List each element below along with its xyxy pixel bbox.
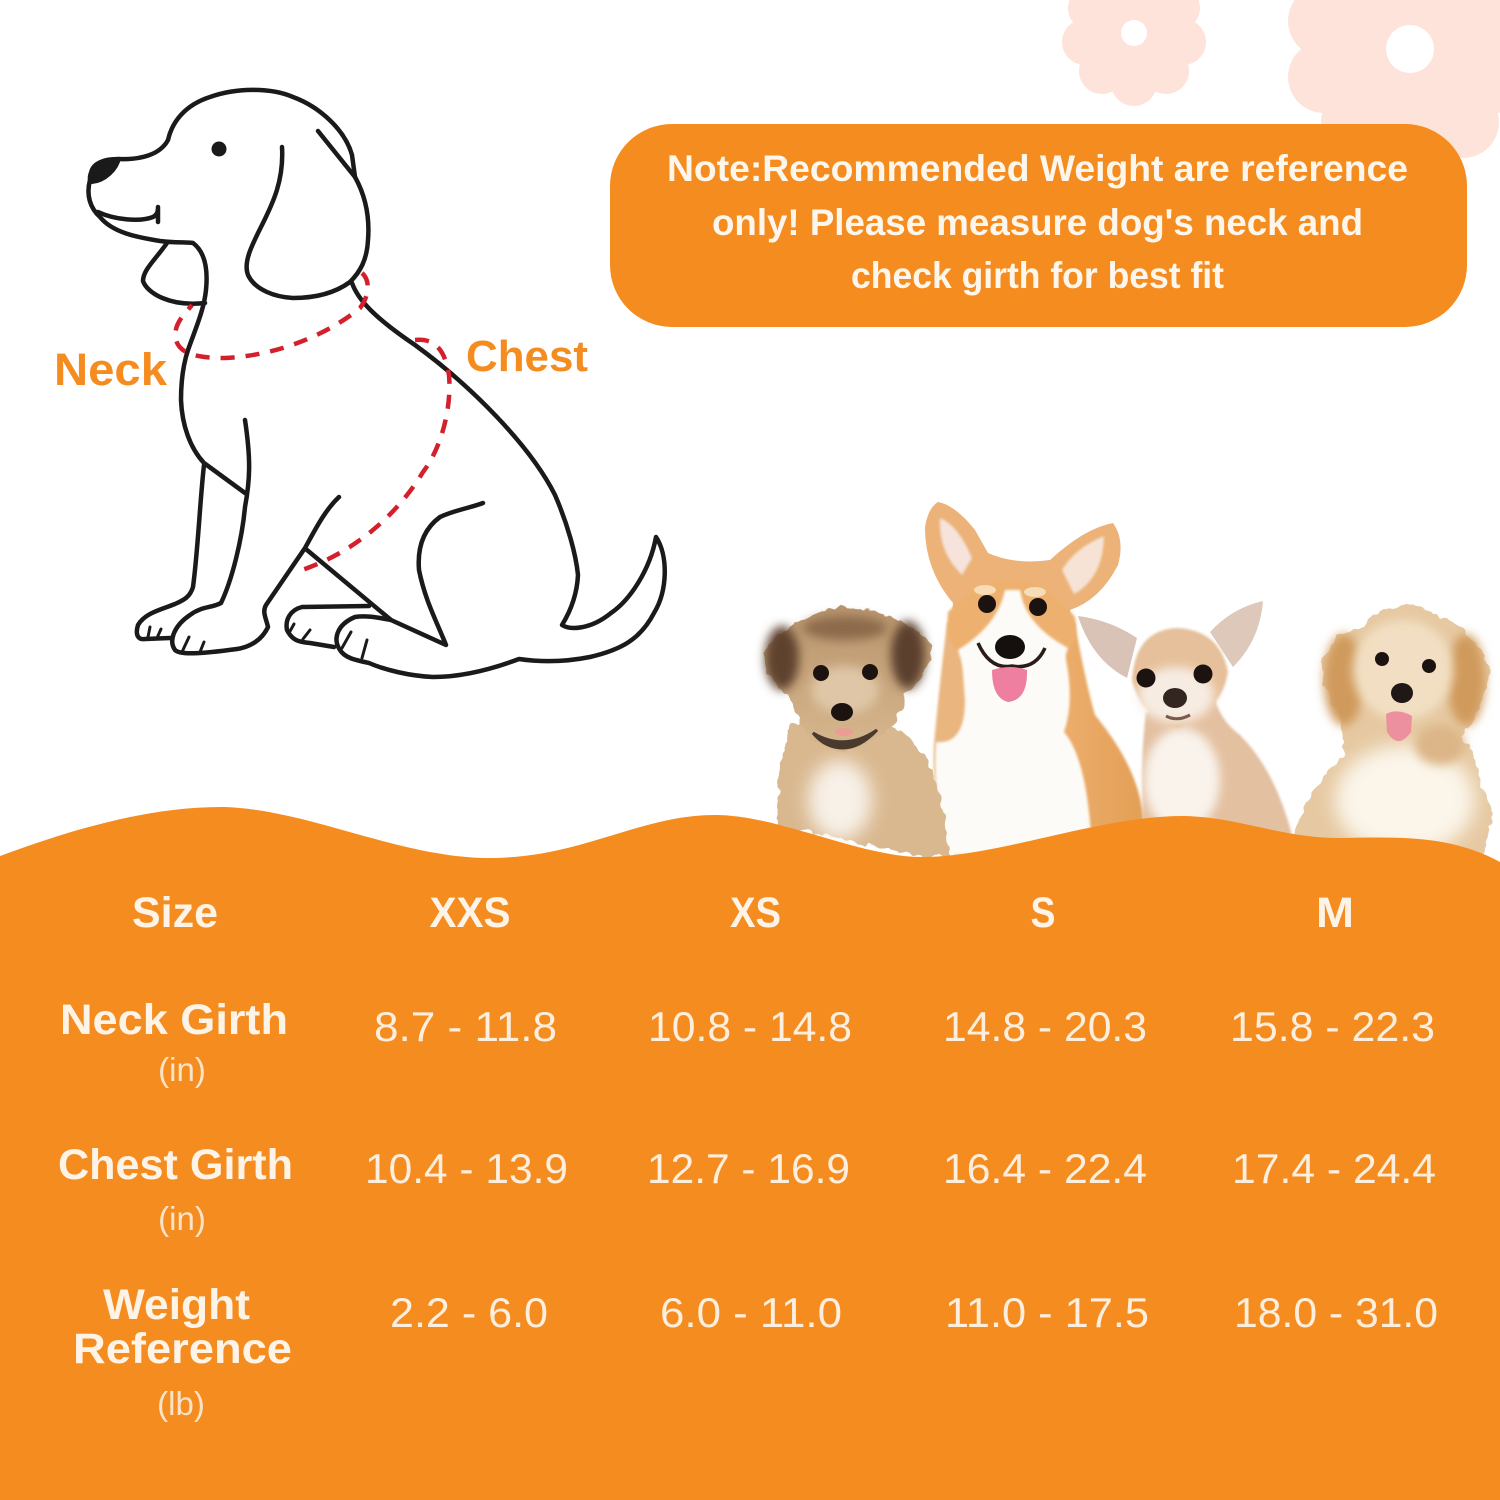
header row: Size bbox=[132, 889, 218, 937]
chest girth row: 16.4 - 22.4 bbox=[943, 1145, 1147, 1192]
header row: S bbox=[1030, 889, 1056, 937]
header row: M bbox=[1316, 889, 1354, 937]
dog 3: chihuahua bbox=[1078, 601, 1292, 850]
chest girth row: Chest Girth bbox=[58, 1141, 293, 1189]
weight reference row bbox=[73, 1281, 1438, 1422]
note callout bbox=[610, 124, 1467, 327]
dog 1: puppy bbox=[762, 607, 950, 856]
header row: XS bbox=[730, 889, 781, 937]
neck girth row: 10.8 - 14.8 bbox=[648, 1003, 852, 1050]
size table bbox=[58, 889, 1438, 1422]
dog 4: havanese bbox=[1293, 605, 1492, 860]
neck girth row: Neck Girth bbox=[60, 996, 288, 1044]
dogs photo bbox=[762, 502, 1492, 860]
header row: XXS bbox=[430, 889, 510, 937]
dog 2: corgi bbox=[925, 502, 1143, 855]
weight reference row: Weight bbox=[103, 1281, 250, 1329]
chest girth row: 12.7 - 16.9 bbox=[647, 1145, 850, 1192]
chest label: Chest bbox=[466, 332, 588, 381]
chest girth row: (in) bbox=[158, 1200, 206, 1237]
neck dashed line bbox=[175, 273, 368, 358]
note callout: only! Please measure dog's neck and bbox=[712, 202, 1363, 243]
chest girth row: 17.4 - 24.4 bbox=[1232, 1145, 1436, 1192]
decorative flower: large bbox=[1288, 0, 1500, 175]
note callout: Note:Recommended Weight are reference bbox=[667, 148, 1408, 189]
dog line drawing bbox=[54, 90, 665, 677]
neck label: Neck bbox=[54, 344, 168, 395]
neck girth row: 8.7 - 11.8 bbox=[374, 1003, 557, 1050]
header row bbox=[132, 889, 1354, 937]
neck girth row: 15.8 - 22.3 bbox=[1230, 1003, 1435, 1050]
neck girth row: 14.8 - 20.3 bbox=[943, 1003, 1147, 1050]
weight reference row: Reference bbox=[73, 1325, 292, 1373]
chest girth row bbox=[58, 1141, 1436, 1237]
weight reference row: (lb) bbox=[157, 1385, 205, 1422]
decorative flower: small bbox=[1062, 0, 1206, 106]
neck girth row: (in) bbox=[158, 1051, 206, 1088]
weight reference row: 18.0 - 31.0 bbox=[1234, 1289, 1438, 1336]
note callout: check girth for best fit bbox=[851, 255, 1224, 296]
weight reference row: 11.0 - 17.5 bbox=[945, 1289, 1149, 1336]
chest girth row: 10.4 - 13.9 bbox=[365, 1145, 568, 1192]
weight reference row: 2.2 - 6.0 bbox=[390, 1289, 548, 1336]
orange wave table background bbox=[0, 807, 1500, 1500]
chest dashed line bbox=[302, 340, 449, 570]
weight reference row: 6.0 - 11.0 bbox=[660, 1289, 842, 1336]
neck girth row bbox=[60, 996, 1435, 1088]
